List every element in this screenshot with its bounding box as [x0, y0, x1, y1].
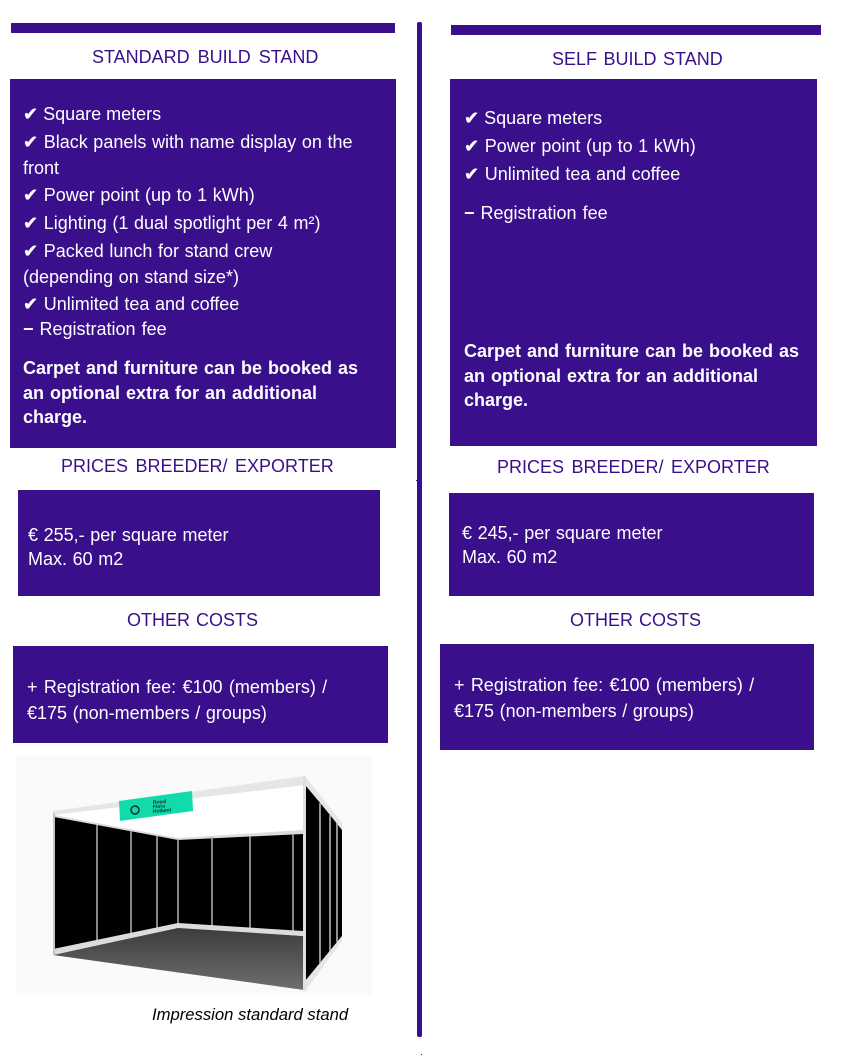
- price text right: € 245,- per square meter: [462, 523, 663, 543]
- note: carpet and furniture: charge.: [464, 390, 528, 410]
- left column: standard build stand: [10, 23, 396, 1024]
- panel: self build inclusions: [450, 79, 817, 446]
- panel: other costs right: [440, 644, 814, 750]
- note: carpet and furniture: [23, 358, 358, 427]
- other costs text right: + Registration fee: €100 (members) /: [454, 675, 754, 695]
- panel: other costs left: [13, 646, 388, 743]
- other costs text left: €175 (non-members / groups): [27, 703, 267, 723]
- item: lighting: ✔ Lighting (1 dual spotlight per 4 m²): [23, 213, 320, 233]
- note: carpet and furniture: Carpet and furniture can be booked as: [464, 341, 799, 361]
- item: tea and coffee: ✔ Unlimited tea and coffee: [23, 294, 239, 314]
- price text left: [28, 525, 229, 569]
- note: carpet and furniture: an optional extra for an additional: [464, 366, 758, 386]
- sign: [119, 791, 193, 821]
- note: carpet and furniture: Carpet and furniture can be booked as: [23, 358, 358, 378]
- panel: standard stand inclusions: [10, 79, 396, 448]
- image: stand impression: [53, 776, 342, 991]
- center divider: [417, 22, 422, 1037]
- panel: price left: [18, 490, 380, 596]
- heading: self build stand: SELF BUILD STAND: [552, 49, 723, 69]
- item: packed lunch continuation: (depending on stand size*): [23, 267, 239, 287]
- other costs text right: [454, 675, 754, 721]
- panel: price right: [449, 493, 814, 596]
- sign: Flora: [153, 803, 166, 810]
- item: packed lunch: ✔ Packed lunch for stand crew: [23, 241, 272, 261]
- heading: prices right: PRICES BREEDER/ EXPORTER: [497, 457, 770, 477]
- item: power point: ✔ Power point (up to 1 kWh): [464, 136, 696, 156]
- heading: other costs right: OTHER COSTS: [570, 610, 701, 630]
- sign: Royal: [153, 799, 167, 806]
- note: carpet and furniture: charge.: [23, 407, 87, 427]
- item: registration fee: − Registration fee: [23, 319, 167, 339]
- right top bar: [451, 25, 821, 35]
- other costs text left: [27, 677, 328, 723]
- other costs text left: + Registration fee: €100 (members) /: [27, 677, 327, 697]
- note: carpet and furniture: an optional extra for an additional: [23, 382, 317, 402]
- item: power point: ✔ Power point (up to 1 kWh): [23, 185, 255, 205]
- left top bar: [11, 23, 395, 33]
- heading: standard build stand: STANDARD BUILD STAND: [92, 47, 318, 67]
- item: registration fee: − Registration fee: [464, 203, 608, 223]
- right column: self build stand: [440, 25, 821, 750]
- sign: Holland: [153, 807, 171, 815]
- item: square meters: ✔ Square meters: [23, 104, 161, 124]
- item: tea and coffee: ✔ Unlimited tea and coffee: [464, 164, 680, 184]
- caption: Impression standard stand: [152, 1005, 348, 1024]
- price text left: Max. 60 m2: [28, 549, 123, 569]
- price text left: € 255,- per square meter: [28, 525, 229, 545]
- other costs text right: €175 (non-members / groups): [454, 701, 694, 721]
- item: black panels continuation: front: [23, 158, 59, 178]
- note: carpet and furniture: [464, 341, 799, 410]
- heading: other costs left: OTHER COSTS: [127, 610, 258, 630]
- price text right: Max. 60 m2: [462, 547, 557, 567]
- heading: prices left: PRICES BREEDER/ EXPORTER: [61, 456, 334, 476]
- item: black panels: ✔ Black panels with name display on the: [23, 132, 352, 152]
- price text right: [462, 523, 663, 567]
- item: square meters: ✔ Square meters: [464, 108, 602, 128]
